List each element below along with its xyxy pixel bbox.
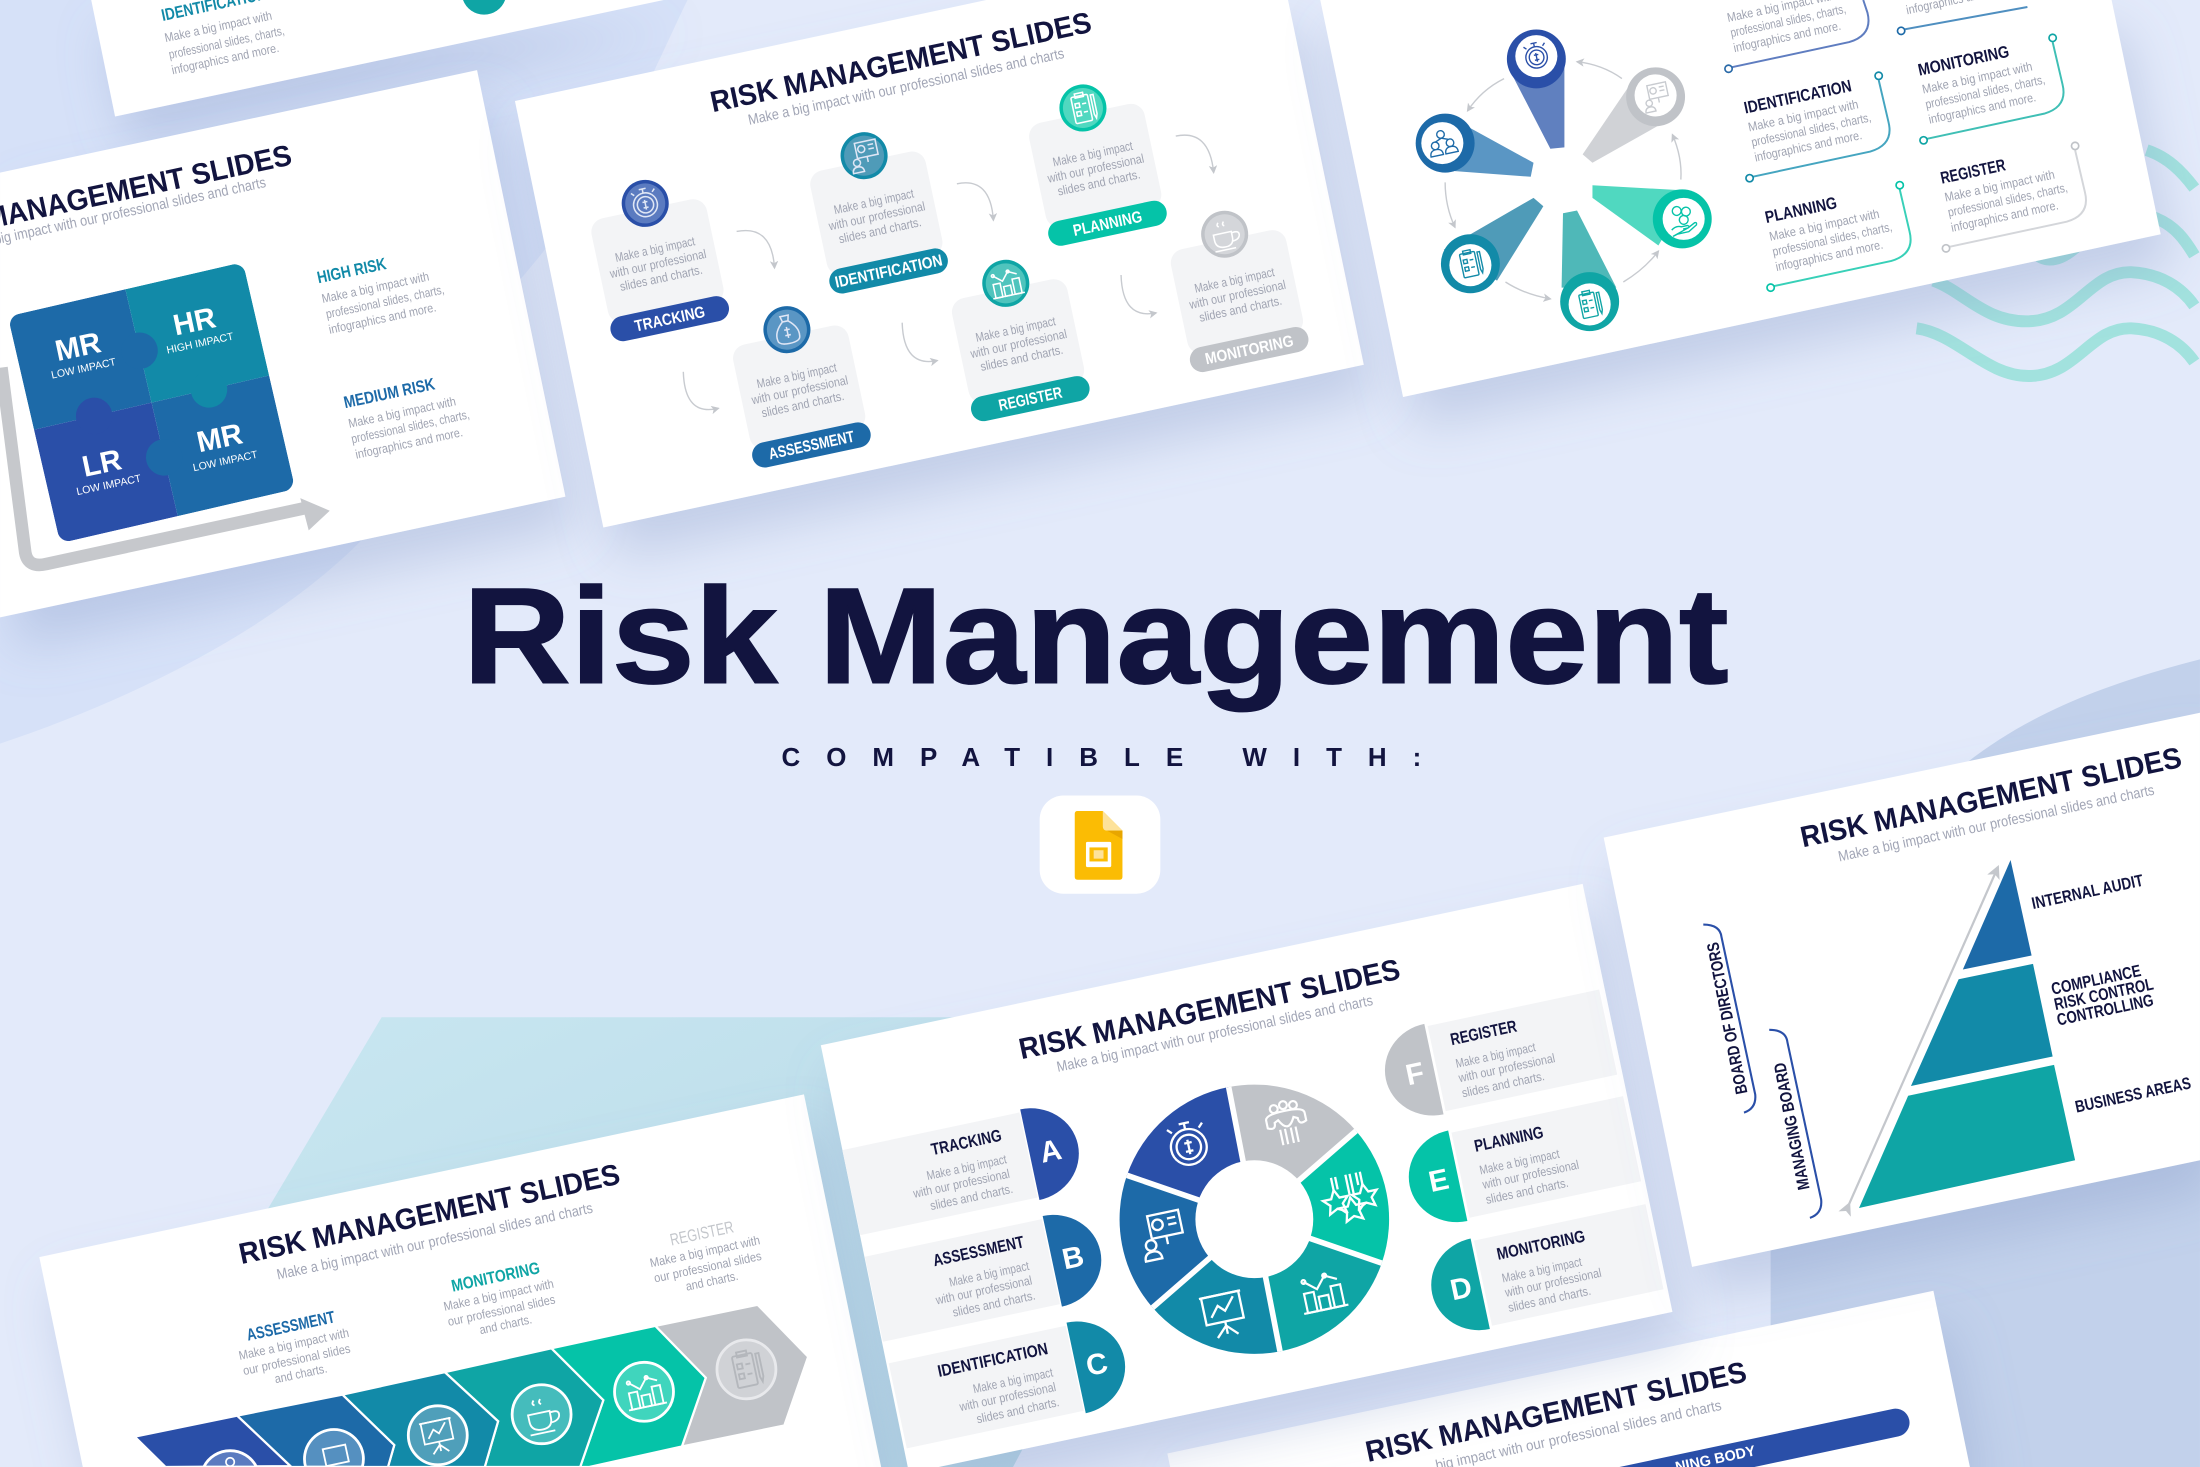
text block: monitoring: professional slides, charts, <box>1924 73 2046 112</box>
card: tracking: Make a big impact <box>614 234 697 265</box>
card: identification: IDENTIFICATION <box>833 251 944 292</box>
label: B assessment: Make a big impact <box>948 1259 1031 1290</box>
label: C identification: slides and charts. <box>975 1395 1060 1426</box>
text block: register: REGISTER <box>668 1217 735 1249</box>
label: B assessment: slides and charts. <box>951 1288 1037 1320</box>
subtitle: Make a big impact with our professional slides and charts <box>1055 993 1374 1076</box>
chevron chain <box>135 1305 808 1467</box>
bracket: board of directors: BOARD OF DIRECTORS <box>1703 941 1751 1096</box>
label: D monitoring: slides and charts. <box>1507 1284 1592 1315</box>
bracket: managing board <box>1769 1030 1821 1218</box>
text block: monitoring: MONITORING <box>1916 42 2011 80</box>
label: A tracking <box>842 1099 1088 1238</box>
text block: register: Make a big impact with <box>649 1233 761 1270</box>
text block: planning <box>1763 182 1911 291</box>
label: A tracking: A <box>1037 1133 1064 1170</box>
card: tracking <box>582 170 731 344</box>
puzzle labels: MR <box>194 417 246 459</box>
chart: puzzle matrix <box>8 262 295 543</box>
label: E planning: with our professional <box>1480 1158 1580 1192</box>
text block: planning: Make a big impact with <box>1768 207 1881 244</box>
text block: high risk: professional slides, charts, <box>325 283 446 321</box>
card: identification: with our professional <box>827 199 926 234</box>
slide: wheel diagram <box>1320 0 2161 397</box>
bracket: board of directors <box>1703 925 1755 1113</box>
card: tracking: slides and charts. <box>619 263 704 294</box>
subtitle: compatible with: COMPATIBLE WITH: <box>782 744 1421 772</box>
card: assessment <box>723 296 873 470</box>
label: F register: REGISTER <box>1449 1017 1518 1049</box>
wheel arrows <box>1445 62 1681 299</box>
puzzle labels: HR <box>170 301 219 342</box>
label: C identification: Make a big impact <box>972 1365 1055 1396</box>
icon: tracking node <box>1507 29 1566 88</box>
text block: register: Make a big impact with <box>1943 168 2056 205</box>
text block: assessment: our professional slides <box>242 1342 352 1378</box>
subtitle: Make a big impact with our professional slides and charts <box>747 46 1066 129</box>
card: monitoring: with our professional <box>1187 278 1287 312</box>
text block: high risk: infographics and more. <box>327 300 437 337</box>
text block: register: and charts. <box>684 1269 739 1294</box>
card: register: slides and charts. <box>979 343 1064 374</box>
icon: assessment node <box>1416 114 1475 173</box>
icon: teal circle <box>463 0 505 15</box>
main title: Risk Management <box>463 560 1729 712</box>
icon: google slides <box>1040 796 1160 894</box>
text block: register: REGISTER <box>1939 155 2007 188</box>
heading: RISK MANAGEMENT SLIDES <box>1016 953 1403 1066</box>
label: F register: F <box>1403 1056 1427 1092</box>
card: planning <box>1019 74 1169 248</box>
slide: pyramid <box>1604 713 2200 1267</box>
text block: monitoring: infographics and more. <box>1927 90 2037 127</box>
card: planning: PLANNING <box>1071 208 1144 240</box>
puzzle labels: HIGH IMPACT <box>165 331 235 357</box>
text block: monitoring: Make a big impact with <box>1921 60 2034 97</box>
text block: assessment: Make a big impact with <box>237 1326 350 1363</box>
text block: assessment: and charts. <box>273 1361 328 1386</box>
label: D monitoring: MONITORING <box>1495 1227 1587 1264</box>
flow arrows <box>683 135 1214 410</box>
text block: planning: PLANNING <box>1763 193 1839 227</box>
label: E planning: slides and charts. <box>1484 1176 1570 1207</box>
text block: monitoring: our professional slides <box>447 1292 556 1329</box>
heading: RISK MANAGEMENT SLIDES <box>1363 1356 1750 1467</box>
background shape: upper-left blob <box>0 0 688 744</box>
heading: RISK MANAGEMENT SLIDES <box>236 1158 623 1271</box>
slide: bottom governing <box>1167 1291 1970 1467</box>
text block: monitoring: and charts. <box>478 1312 533 1337</box>
slide: flow process <box>515 0 1364 528</box>
bracket: managing board: MANAGING BOARD <box>1770 1061 1814 1191</box>
label: C identification: with our professional <box>957 1380 1057 1414</box>
text block: monitoring <box>1916 34 2064 144</box>
text block: medium risk: MEDIUM RISK <box>342 374 437 412</box>
arrow: double-headed axis <box>1849 867 1998 1204</box>
label: C identification: IDENTIFICATION <box>936 1339 1050 1381</box>
text block: monitoring: Make a big impact with <box>442 1277 555 1314</box>
card: register: REGISTER <box>997 384 1064 415</box>
text block: identification: infographics and more. <box>1753 128 1863 165</box>
text block: register: our professional slides <box>653 1249 763 1285</box>
text block: assessment <box>237 1307 352 1386</box>
text block: identification: Make a big impact with <box>1747 97 1860 134</box>
decorative teal waves <box>1917 150 2194 376</box>
background shape: lower-right blob <box>1771 659 2200 1467</box>
puzzle labels: LOW IMPACT <box>50 356 118 382</box>
label: A tracking: Make a big impact <box>925 1152 1008 1183</box>
wheel wedges <box>1444 59 1691 288</box>
chevron icons <box>204 1340 776 1467</box>
text block: register <box>649 1217 763 1294</box>
label: D monitoring: Make a big impact <box>1501 1255 1584 1285</box>
card: planning: Make a big impact <box>1052 139 1134 169</box>
text block <box>163 9 286 77</box>
label: B assessment: B <box>1059 1240 1087 1276</box>
label: C identification: C <box>1083 1346 1111 1383</box>
puzzle labels: LOW IMPACT <box>192 449 259 474</box>
slide: risk matrix puzzle <box>0 70 565 617</box>
text block: register: infographics and more. <box>1950 198 2060 235</box>
pyramid labels <box>2030 871 2193 1117</box>
text block: identification <box>1742 72 1890 182</box>
label: A tracking: with our professional <box>911 1167 1011 1201</box>
label: B assessment: with our professional <box>934 1273 1033 1308</box>
arrow: gray axis <box>1 368 330 565</box>
label: B assessment: ASSESSMENT <box>931 1232 1026 1270</box>
slide: top-left identification <box>91 0 664 116</box>
text block: assessment: ASSESSMENT <box>245 1307 337 1345</box>
heading: RISK MANAGEMENT SLIDES <box>707 6 1094 119</box>
pyramid labels: CONTROLLING <box>2055 991 2155 1030</box>
card: register: with our professional <box>968 327 1068 361</box>
icon: identification node <box>1441 234 1500 293</box>
puzzle labels: LOW IMPACT <box>75 472 143 498</box>
card: monitoring: Make a big impact <box>1193 265 1276 296</box>
slide: chevron process <box>39 1094 881 1467</box>
label: A tracking: TRACKING <box>929 1126 1003 1159</box>
card: register: Make a big impact <box>974 314 1057 345</box>
text block: monitoring <box>442 1258 556 1337</box>
label: D monitoring: with our professional <box>1503 1266 1603 1300</box>
card: tracking: TRACKING <box>633 303 707 336</box>
icon: register node <box>1560 272 1619 331</box>
card: tracking: with our professional <box>608 247 708 281</box>
text block: tracking <box>1725 0 1869 72</box>
label: B assessment <box>864 1206 1110 1345</box>
text block: medium risk: professional slides, charts, <box>350 408 471 446</box>
text block: medium risk <box>342 374 471 462</box>
card: assessment: Make a big impact <box>755 360 838 391</box>
label: E planning: E <box>1426 1163 1452 1199</box>
label: D monitoring <box>1423 1201 1664 1339</box>
card: assessment: ASSESSMENT <box>767 428 856 463</box>
card: planning: slides and charts. <box>1056 167 1142 199</box>
card: register <box>942 250 1092 424</box>
label: F register: Make a big impact <box>1454 1040 1537 1071</box>
text block: monitoring: MONITORING <box>450 1258 541 1296</box>
bar: governing body <box>1619 1406 1912 1467</box>
pyramid labels: RISK CONTROL <box>2052 975 2155 1014</box>
label: D monitoring: D <box>1447 1270 1475 1307</box>
heading: RISK MANAGEMENT SLIDES <box>1798 741 2185 854</box>
subtitle: Make a big impact with our professional slides and charts <box>275 1201 594 1283</box>
label: F register: slides and charts. <box>1461 1069 1546 1100</box>
label: C identification <box>888 1312 1134 1451</box>
card: assessment: with our professional <box>749 373 849 407</box>
card: identification <box>801 122 950 296</box>
pyramid chart <box>1859 860 2075 1208</box>
text block: planning: infographics and more. <box>1774 238 1884 274</box>
label: E planning: PLANNING <box>1473 1123 1545 1156</box>
label: F register <box>1376 987 1618 1125</box>
slide: donut chart <box>821 884 1672 1467</box>
puzzle labels: MR <box>52 326 104 368</box>
text block: infographics and more. <box>170 41 280 77</box>
card: monitoring <box>1161 200 1311 374</box>
label: E planning: Make a big impact <box>1478 1147 1561 1177</box>
card: monitoring: slides and charts. <box>1198 294 1283 325</box>
puzzle labels: LR <box>79 443 125 484</box>
card: identification: Make a big impact <box>833 186 916 217</box>
text block: high risk: Make a big impact with <box>320 270 430 306</box>
icon: planning node <box>1653 189 1712 248</box>
label: F register: with our professional <box>1457 1051 1556 1085</box>
label: E planning <box>1400 1093 1642 1231</box>
text block: identification: IDENTIFICATION <box>1742 76 1853 118</box>
text block: tracking: infographics and more. <box>1732 19 1842 55</box>
puzzle labels <box>50 301 259 498</box>
card: identification: slides and charts. <box>837 215 923 246</box>
pyramid labels: COMPLIANCE <box>2050 961 2143 999</box>
text block: medium risk: infographics and more. <box>354 425 464 462</box>
donut chart <box>1120 1085 1389 1354</box>
text block: high risk <box>315 254 446 337</box>
icon: monitoring node <box>1626 67 1685 126</box>
text block: register <box>1939 142 2086 252</box>
card: planning: with our professional <box>1046 152 1145 186</box>
text block: high risk: HIGH RISK <box>315 254 388 287</box>
text block: register: professional slides, charts, <box>1947 181 2069 220</box>
text block: medium risk: Make a big impact with <box>347 394 457 431</box>
text block: Make a big impact with <box>163 9 273 45</box>
pyramid labels: INTERNAL AUDIT <box>2030 871 2146 913</box>
card: monitoring: MONITORING <box>1204 332 1295 368</box>
text block: professional slides, charts, <box>168 24 286 62</box>
subtitle: Make a big impact with our professional slides and charts <box>1837 783 2156 865</box>
text block: identification: professional slides, charts, <box>1750 110 1872 150</box>
background shape: light blue band <box>210 1017 1122 1467</box>
card: assessment: slides and charts. <box>760 389 845 420</box>
label: A tracking: slides and charts. <box>929 1182 1014 1213</box>
text block: assessment <box>1897 0 2027 35</box>
text block: planning: professional slides, charts, <box>1771 220 1893 259</box>
